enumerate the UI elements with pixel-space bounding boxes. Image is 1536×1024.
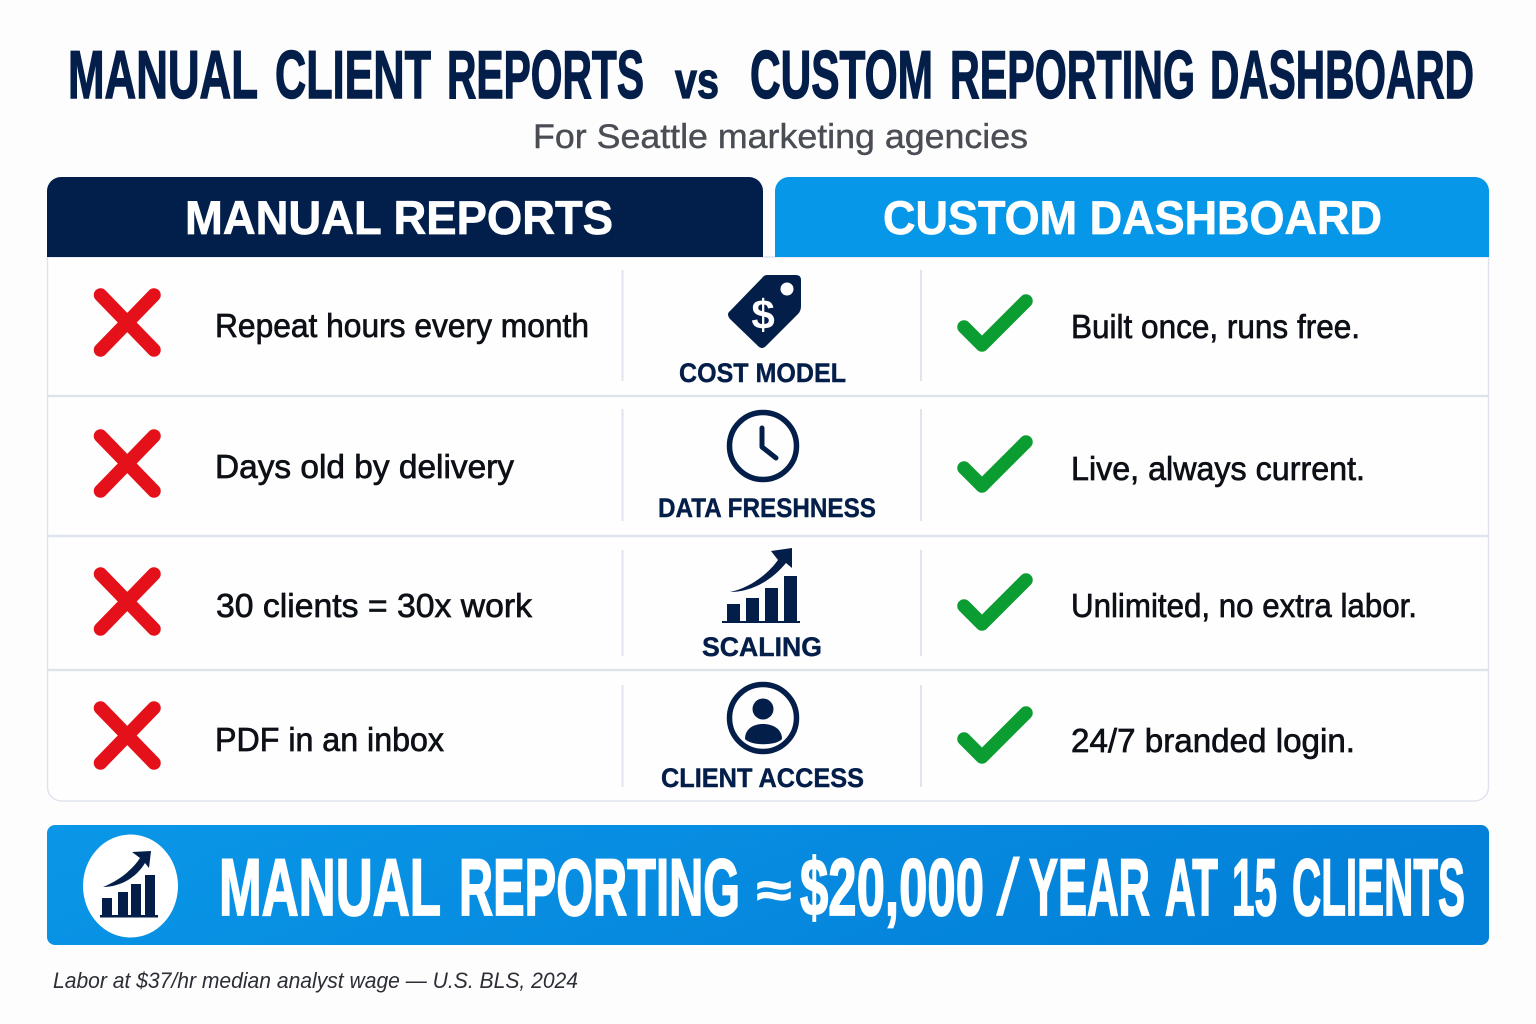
footnote: Labor at $37/hr median analyst wage — U.S. BLS, 2024 (53, 968, 578, 993)
heading: manual reports: MANUAL REPORTS (185, 192, 613, 245)
icon: red cross (100, 295, 154, 350)
title: vs (675, 52, 719, 109)
panel: comparison table (48, 257, 1489, 801)
text: banner headline: REPORTING (459, 843, 740, 933)
text: banner headline: $20,000 (800, 843, 984, 933)
label: client access: CLIENT ACCESS (661, 763, 864, 793)
icon: red cross (100, 708, 154, 763)
text: dashboard scaling: Unlimited, no extra labor. (1071, 587, 1417, 624)
text: banner headline: YEAR (1029, 843, 1150, 933)
text: dashboard freshness: Live, always current. (1071, 450, 1365, 487)
text: dashboard access: 24/7 branded login. (1071, 722, 1355, 759)
title: CLIENT (275, 37, 431, 113)
icon: green check (964, 301, 1026, 345)
heading: custom dashboard: CUSTOM DASHBOARD (883, 192, 1382, 245)
icon: red cross (100, 574, 154, 629)
row: data freshness (100, 412, 1365, 523)
text: banner headline: 15 (1232, 843, 1277, 933)
icon: red cross (100, 436, 154, 491)
text: manual cost: Repeat hours every month (215, 307, 589, 344)
label: cost model: COST MODEL (679, 358, 846, 388)
text: banner headline: MANUAL (219, 843, 441, 933)
icon: price tag: $ (751, 291, 775, 338)
title (68, 37, 1474, 113)
title: REPORTING (950, 37, 1195, 113)
row: client access (100, 684, 1355, 793)
text: banner headline (219, 843, 1465, 933)
title: CUSTOM (750, 37, 933, 113)
label: data freshness: DATA FRESHNESS (658, 493, 876, 523)
text: banner headline: ≈ (757, 864, 791, 916)
icon: growth chart (722, 548, 800, 623)
text: manual access: PDF in an inbox (215, 721, 444, 758)
subtitle: For Seattle marketing agencies (533, 118, 1028, 156)
icon: green check (964, 713, 1026, 757)
text: banner headline: / (996, 843, 1021, 933)
text: manual scaling: 30 clients = 30x work (216, 587, 533, 624)
text: manual freshness: Days old by delivery (215, 448, 515, 485)
heading: custom dashboard (775, 177, 1489, 257)
callout: cost banner (47, 825, 1489, 993)
icon: clock (730, 412, 796, 480)
row: cost model (100, 275, 1360, 388)
icon: chart badge (83, 834, 178, 938)
label: scaling: SCALING (702, 632, 822, 662)
row: scaling (100, 548, 1417, 662)
icon: green check (964, 442, 1026, 486)
title: REPORTS (447, 37, 644, 113)
icon: price tag (728, 275, 801, 348)
heading: manual reports (47, 177, 763, 257)
title: MANUAL (68, 37, 258, 113)
icon: green check (964, 580, 1026, 624)
icon: user circle (730, 684, 796, 752)
text: banner headline: AT (1165, 843, 1218, 933)
text: dashboard cost: Built once, runs free. (1071, 308, 1360, 345)
